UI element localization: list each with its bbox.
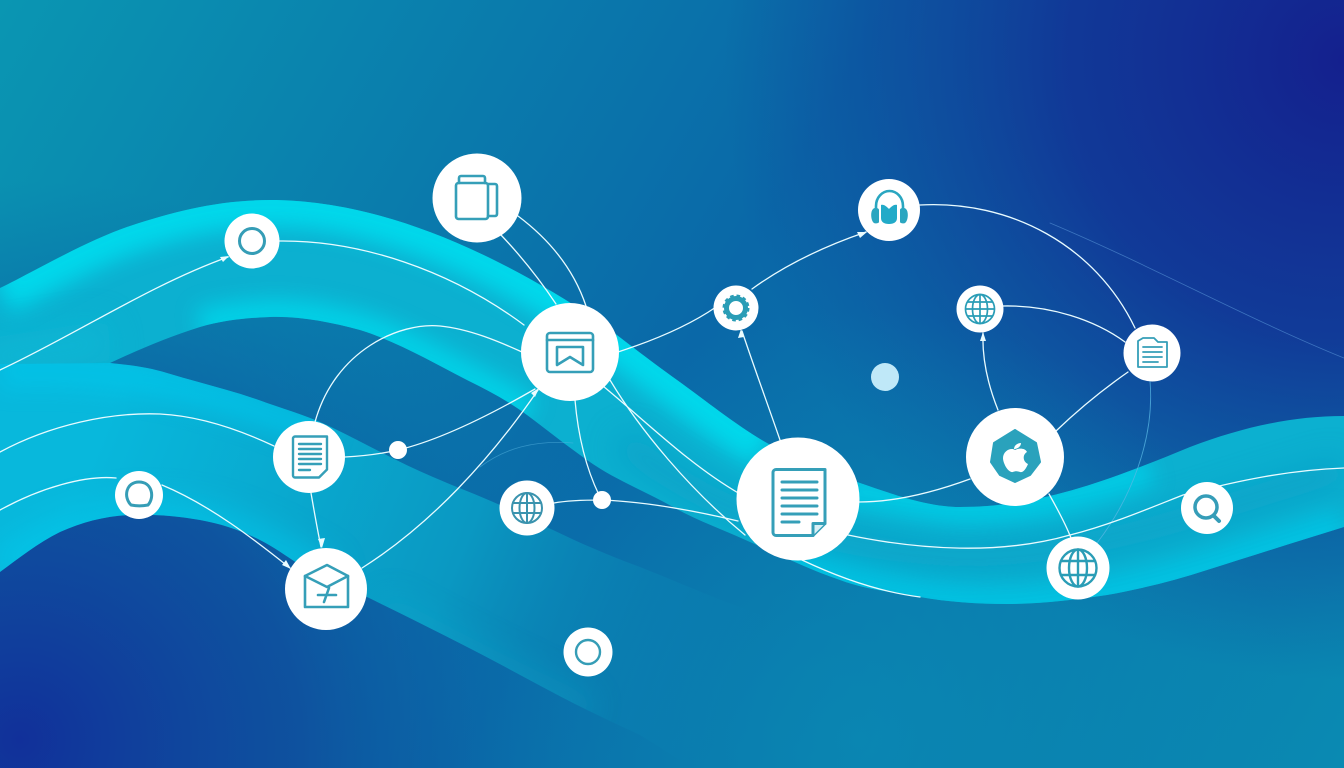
ribbon: lower left band	[0, 363, 652, 718]
node: document right	[1124, 324, 1180, 382]
link: apple to document right	[1056, 372, 1128, 431]
link: window to big document upper	[603, 386, 740, 494]
node: pale dot	[871, 363, 899, 391]
link: globe to document right	[1003, 306, 1125, 342]
link: folder to window left	[501, 235, 556, 304]
connector lines	[0, 205, 1344, 597]
ribbon: upper main band	[0, 190, 1344, 620]
node: ring top left	[224, 214, 280, 268]
node: document left	[273, 421, 345, 493]
link: document right faint down	[1097, 381, 1151, 543]
link: big document to right edge	[848, 468, 1344, 548]
link: gear to headphones	[752, 232, 866, 289]
link: window to gear	[618, 307, 716, 352]
link: chat to box	[162, 485, 290, 568]
node: chat bubble	[115, 471, 163, 519]
link: big document to apple	[859, 479, 970, 502]
link: big document to gear	[742, 331, 780, 440]
node: big document	[736, 438, 860, 560]
link: apple to globe	[983, 333, 998, 410]
node: apple shield	[966, 408, 1064, 506]
link: document to window arc	[315, 326, 522, 422]
node: gear	[714, 286, 758, 330]
link: big document to bottom sweep	[802, 560, 920, 597]
link: faint line top right	[1050, 223, 1344, 358]
link: document to box	[311, 493, 321, 547]
node: window bookmark	[521, 303, 619, 401]
node: headphones	[858, 179, 920, 241]
link: apple to lower globe	[1049, 494, 1071, 538]
link: faint arc center	[480, 442, 573, 467]
node: search	[1181, 482, 1233, 534]
link: globe to dot to big document	[554, 500, 738, 521]
node: globe lower	[1046, 536, 1110, 600]
node: globe center	[500, 480, 554, 536]
link: ring node to window node	[279, 241, 524, 325]
link: left edge to ring node	[0, 257, 228, 370]
link: window to big document lower	[610, 380, 745, 535]
link: left edge to document	[0, 414, 274, 452]
link: folder to window right	[518, 216, 586, 306]
node: globe upper	[956, 286, 1004, 332]
node: folder	[432, 154, 522, 242]
node: ring bottom	[564, 628, 612, 676]
node: envelope box	[285, 548, 367, 630]
node: small dot left	[389, 441, 407, 459]
link: document to dot to window	[345, 389, 535, 457]
link: left edge to chat	[0, 478, 116, 510]
link: box to window	[362, 390, 538, 568]
link: headphones to document right	[920, 205, 1135, 328]
node: small dot center	[593, 491, 611, 509]
arrowheads	[220, 232, 986, 569]
link: window to small dot	[575, 400, 599, 495]
